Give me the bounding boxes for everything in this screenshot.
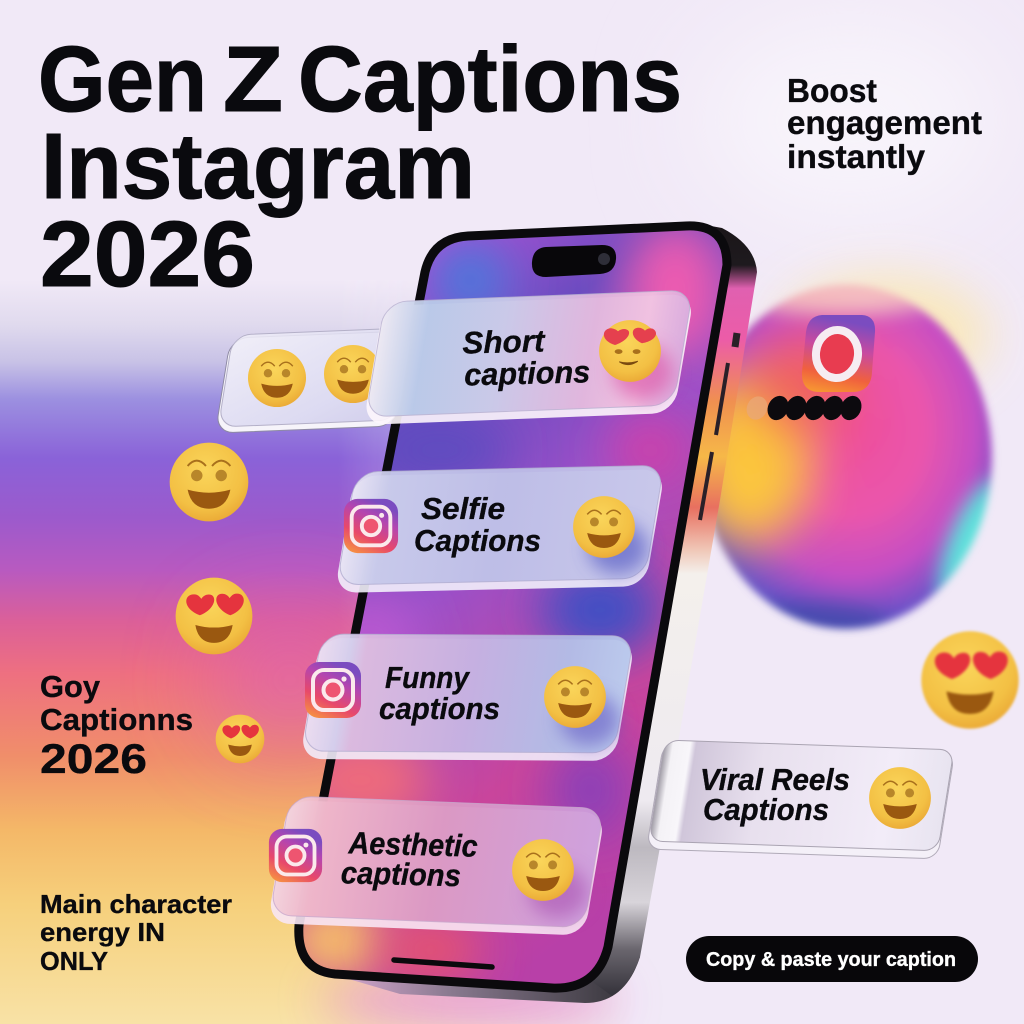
label [700,762,850,827]
title: 2026 [40,202,255,306]
row of black dots [743,392,865,424]
emoji shadow [588,522,648,574]
emoji [544,666,606,728]
emoji: large heart eyes [921,631,1019,729]
text block: goy captions 2026: Goy [40,669,101,704]
card: short captions [363,290,695,425]
emoji: floating heart eyes [176,578,252,654]
card: aesthetic captions [267,796,606,936]
emoji: small heart eyes [216,715,264,763]
label: Funny [385,660,471,695]
emoji shadow [528,866,588,918]
text block: main character energy: Main character [40,889,232,919]
text block: main character energy [40,889,232,976]
icon: sphere logo [802,315,875,392]
label: captions [379,691,500,726]
label: Short [462,323,547,360]
label [379,660,500,726]
label: captions [340,855,461,893]
phone bezel [299,226,727,988]
label [462,322,591,392]
sphere with gradient [713,251,1010,635]
text block: goy captions 2026: 2026 [40,735,147,782]
emoji [324,345,382,403]
button: copy and paste: Copy & paste your caption [706,949,956,971]
label [340,825,478,894]
tagline: boost engagement: instantly [787,138,926,175]
home bar [394,960,492,967]
label: Selfie [421,491,505,526]
text block: main character energy: ONLY [40,946,108,976]
emoji shadow [613,344,673,400]
text block: main character energy: energy IN [40,917,165,947]
title: Gen [38,27,207,131]
emoji [869,767,931,829]
emoji shadow [560,694,620,746]
label: Captions [703,792,829,827]
card: funny captions [300,634,636,761]
phone side body [590,224,757,996]
phone screen [303,230,722,984]
title: Instagram [41,114,475,218]
label: Viral Reels [700,762,850,797]
button: copy and paste [686,936,978,982]
text block: goy captions 2026: Captionns [40,702,193,737]
label: captions [464,354,591,392]
tagline: boost engagement [787,72,982,175]
text block: goy captions 2026 [40,669,193,782]
icon: instagram [269,829,322,882]
card: small emoji card [215,328,412,433]
title [38,27,682,306]
emoji [573,496,635,558]
phone [285,220,757,1003]
tagline: boost engagement: Boost [787,72,877,109]
emoji [599,320,661,382]
title: Z [223,27,283,131]
phone side buttons [700,333,737,520]
label: Aesthetic [347,825,478,864]
label [414,491,541,558]
emoji: floating smile [170,443,248,521]
emoji [248,349,306,407]
emoji [512,839,574,901]
icon: instagram [344,499,398,553]
icon: instagram [305,662,361,718]
card: selfie captions [334,465,666,593]
card: viral reels captions [647,740,955,859]
dynamic island [532,245,616,277]
label: Captions [414,523,541,558]
tagline: boost engagement: engagement [787,104,982,141]
title: Captions [298,27,682,131]
phone underside [335,945,640,1003]
